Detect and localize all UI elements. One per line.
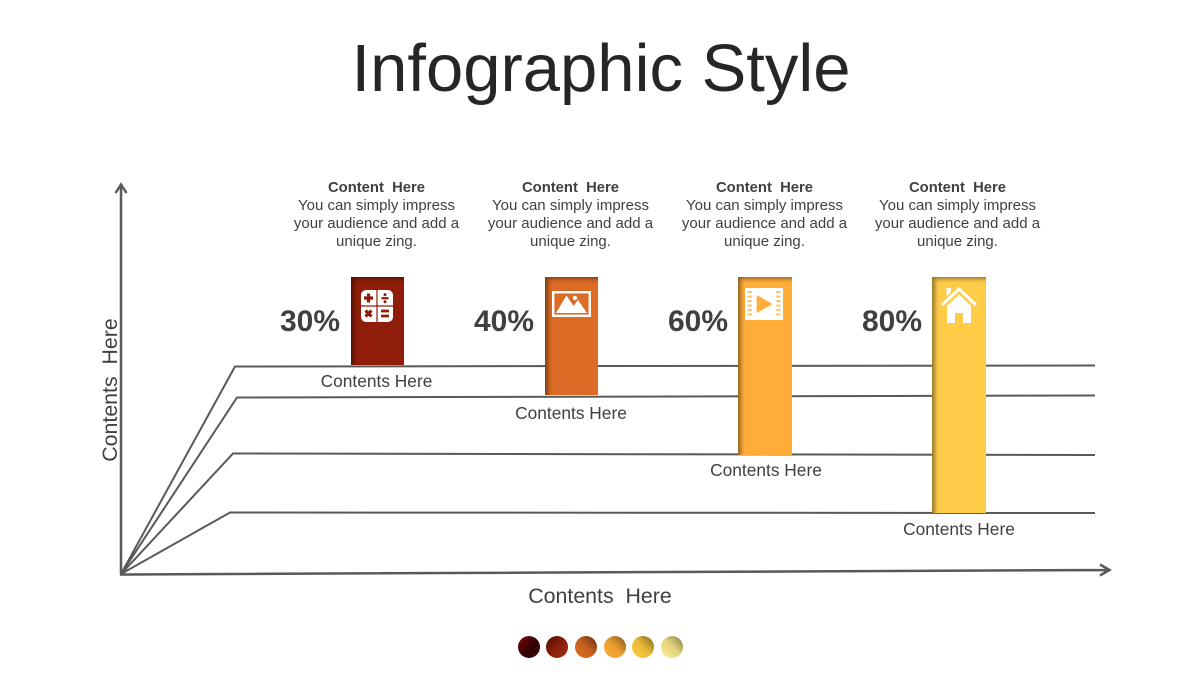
text block 4: Content Here xyxy=(909,180,1006,196)
text block 2 xyxy=(488,180,654,250)
text block 2: your audience and add a xyxy=(488,215,653,232)
icon: home xyxy=(941,287,977,323)
text block 3: your audience and add a xyxy=(682,215,847,232)
text block 4: your audience and add a xyxy=(875,215,1040,232)
percent 60: 60% xyxy=(668,305,728,338)
text block 4 xyxy=(875,180,1040,250)
dot 5 xyxy=(632,636,654,658)
dot 1 xyxy=(518,636,540,658)
dot 3 xyxy=(574,636,596,658)
text block 1: your audience and add a xyxy=(294,215,459,232)
text block 3: unique zing. xyxy=(724,233,805,250)
text block 1: You can simply impress xyxy=(298,197,455,214)
y axis arrow xyxy=(116,184,126,574)
bar 60% with film icon xyxy=(738,276,792,455)
bar 40% with picture icon xyxy=(544,276,598,395)
bar 30% with calculator icon xyxy=(350,276,404,365)
icon: picture xyxy=(552,291,591,317)
text block 3: Content Here xyxy=(716,180,813,196)
y axis label: Contents Here xyxy=(98,318,122,462)
x axis arrow xyxy=(120,564,1110,576)
level line 40% xyxy=(121,396,1095,574)
percent 80: 80% xyxy=(862,305,922,338)
dot 6 xyxy=(661,636,683,658)
percent 40: 40% xyxy=(474,305,534,338)
text block 3 xyxy=(682,180,848,250)
text block 2: You can simply impress xyxy=(492,197,649,214)
title: Infographic Style xyxy=(351,30,851,106)
label under bar 1: Contents Here xyxy=(321,371,432,391)
icon: film play xyxy=(745,288,783,320)
icon: calculator xyxy=(361,290,393,322)
text block 1 xyxy=(294,180,460,250)
label under bar 2: Contents Here xyxy=(515,403,627,423)
label under bar 4: Contents Here xyxy=(903,519,1015,539)
text block 2: Content Here xyxy=(522,180,619,196)
text block 1: Content Here xyxy=(328,180,425,196)
percent 30: 30% xyxy=(280,305,340,338)
level line 80% xyxy=(121,512,1095,574)
dot 4 xyxy=(604,636,626,658)
x axis label: Contents Here xyxy=(528,584,672,608)
text block 1: unique zing. xyxy=(336,233,417,250)
level line 30% xyxy=(121,366,1095,574)
text block 4: unique zing. xyxy=(917,233,998,250)
dot 2 xyxy=(546,636,568,658)
colour dots legend xyxy=(518,636,683,658)
level line 60% xyxy=(121,454,1095,574)
text block 3: You can simply impress xyxy=(686,197,843,214)
bar 80% with home icon xyxy=(932,276,986,513)
label under bar 3: Contents Here xyxy=(710,460,822,480)
text block 4: You can simply impress xyxy=(879,197,1036,214)
text block 2: unique zing. xyxy=(530,233,611,250)
